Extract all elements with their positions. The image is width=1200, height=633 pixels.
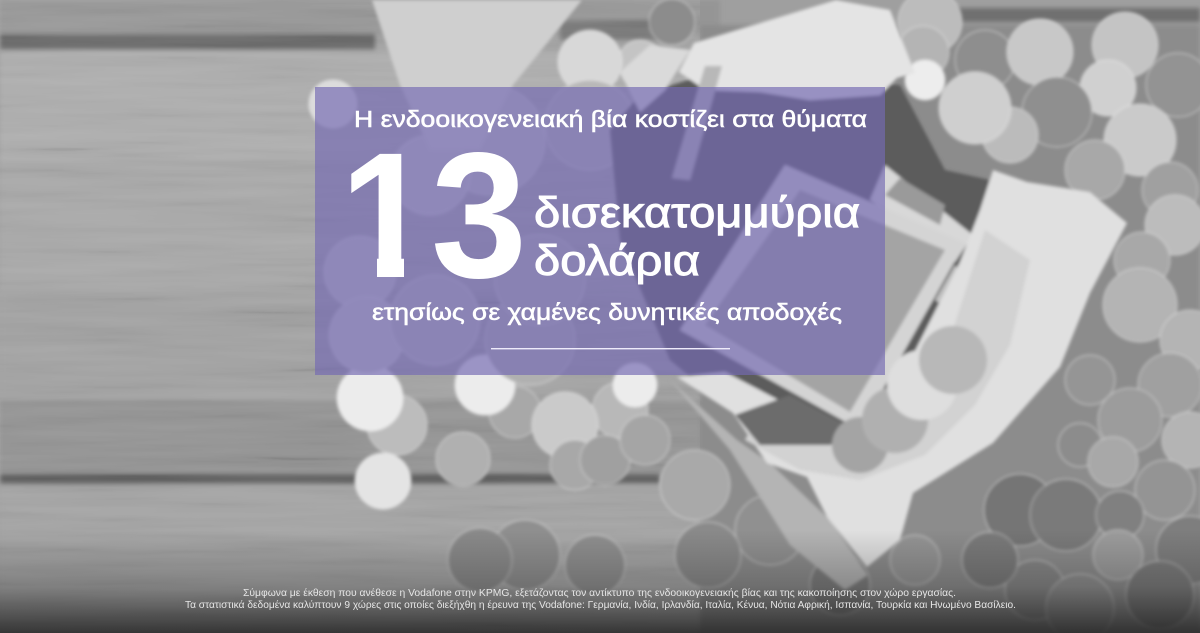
footnote: Τα στατιστικά δεδομένα καλύπτουν 9 χώρες στις οποίες διεξήχθη η έρευνα της Vodafone: Γερμανία, Ινδία, Ιρλανδία, Ιταλία, Κένυα, Νότια Αφρική, Ισπανία, Τουρκία και Ηνωμένο Βασίλειο.: [185, 599, 1016, 611]
shell outer grey tail: [670, 380, 868, 590]
heading: Η ενδοοικογενειακή βία κοστίζει στα θύματα: [354, 106, 867, 132]
subheading: ετησίως σε χαμένες δυνητικές αποδοχές: [372, 299, 842, 325]
bottom dark fade: [0, 530, 1200, 633]
piggy bank shell: [372, 0, 1127, 590]
dark hollow: [735, 395, 860, 445]
big number: 3: [431, 115, 527, 315]
unit text: [534, 189, 860, 285]
coins inside shell: [832, 417, 888, 473]
top-left shell fragment: [372, 0, 582, 150]
rear banknote: [870, 165, 973, 262]
footnote: [185, 587, 1016, 611]
panel: purple statistic box: [315, 87, 885, 375]
big number: 1: [340, 115, 432, 315]
dark shell interior: [610, 70, 1070, 470]
shell main body: [677, 170, 1127, 567]
front banknote: [680, 165, 965, 430]
footnote: Σύμφωνα με έκθεση που ανέθεσε η Vodafone στην KPMG, εξετάζοντας τον αντίκτυπο της ενδοοικογενειακής βίας και της κακοποίησης στον χώρο εργασίας.: [243, 587, 956, 599]
unit text: δολάρια: [534, 237, 700, 285]
big number: [351, 152, 521, 279]
unit text: δισεκατομμύρια: [534, 189, 860, 237]
coins: [309, 0, 1200, 633]
top-right shell fragment: [679, 0, 915, 100]
